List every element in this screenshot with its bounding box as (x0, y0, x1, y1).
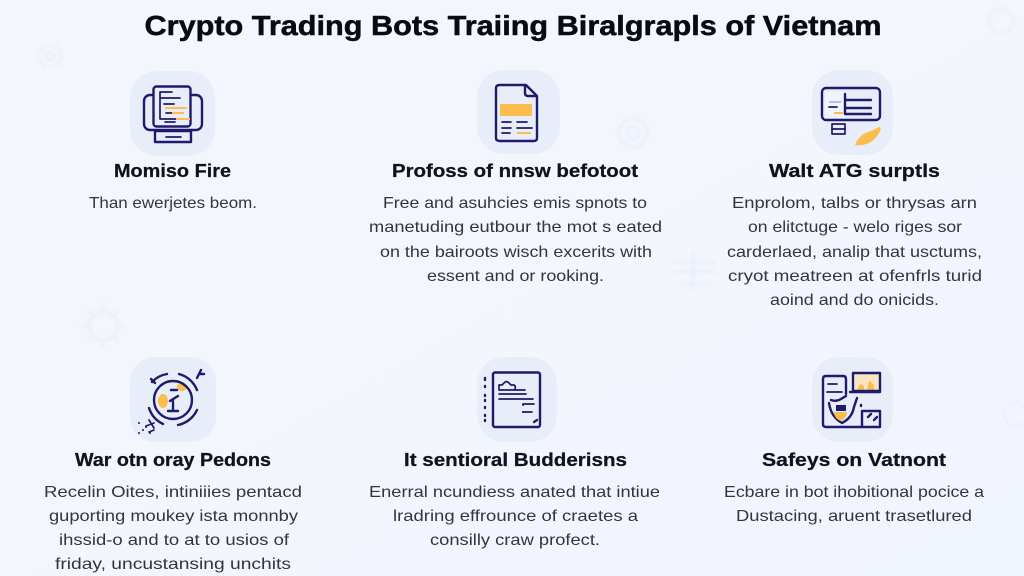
description: on elitctuge - welo riges sor (748, 219, 963, 236)
description: carderlaed, analip that usctums, (727, 244, 982, 261)
description: on the bairoots wisch excerits with (380, 244, 652, 261)
heading: War otn oray Pedons (75, 450, 271, 470)
description (724, 484, 984, 525)
description: Free and asuhcies emis spnots to (383, 195, 647, 212)
icon: shield and panels (812, 357, 893, 442)
description (727, 195, 982, 309)
description (369, 195, 662, 285)
description: consilly craw profect. (430, 532, 600, 549)
description: lradring effrounce of craetes a (393, 508, 638, 525)
description: ihssid-o and to at to usios of (59, 532, 290, 549)
description: aoind and do onicids. (770, 292, 939, 309)
description (369, 484, 660, 549)
description: cryot meatreen at ofenfrls turid (728, 268, 982, 285)
heading: Momiso Fire (114, 161, 231, 181)
panel: Profoss (369, 70, 662, 285)
panel: Momiso Fire (89, 71, 257, 212)
description: Dustacing, aruent trasetlured (736, 508, 972, 525)
panel: It sentioral Budderisns (369, 357, 660, 549)
icon: monitor with document (130, 71, 215, 156)
heading: Profoss of nnsw befotoot (392, 161, 638, 181)
panel: War otn oray Pedons (44, 357, 302, 573)
icon: screen with leaf (812, 70, 893, 155)
description: Recelin Oites, intiniiies pentacd (44, 484, 302, 501)
description: guporting moukey ista monnby (49, 508, 298, 525)
heading: Safeys on Vatnont (762, 450, 946, 470)
heading: Walt ATG surptls (769, 161, 940, 181)
decorative background gears (39, 9, 1024, 426)
title: Crypto Trading Bots Traiing Biralgrapls of Vietnam (144, 10, 882, 41)
description: essent and or rooking. (427, 268, 604, 285)
panel: Safeys on Vatnont (724, 357, 984, 525)
description: manetuding eutbour the mot s eated (369, 219, 662, 236)
description: Ecbare in bot ihobitional pocice a (724, 484, 984, 501)
icon: document (477, 70, 560, 154)
description: Than ewerjetes beom. (89, 195, 257, 212)
description: friday, uncustansing unchits (55, 556, 291, 573)
panel: Walt ATG (727, 70, 982, 309)
icon: circular target with tools (130, 357, 216, 442)
description: Enerral ncundiess anated that intiue (369, 484, 660, 501)
description: Enprolom, talbs or thrysas arn (732, 195, 977, 212)
description (44, 484, 302, 573)
heading: It sentioral Budderisns (404, 450, 627, 470)
icon: notepad checklist (477, 357, 557, 442)
